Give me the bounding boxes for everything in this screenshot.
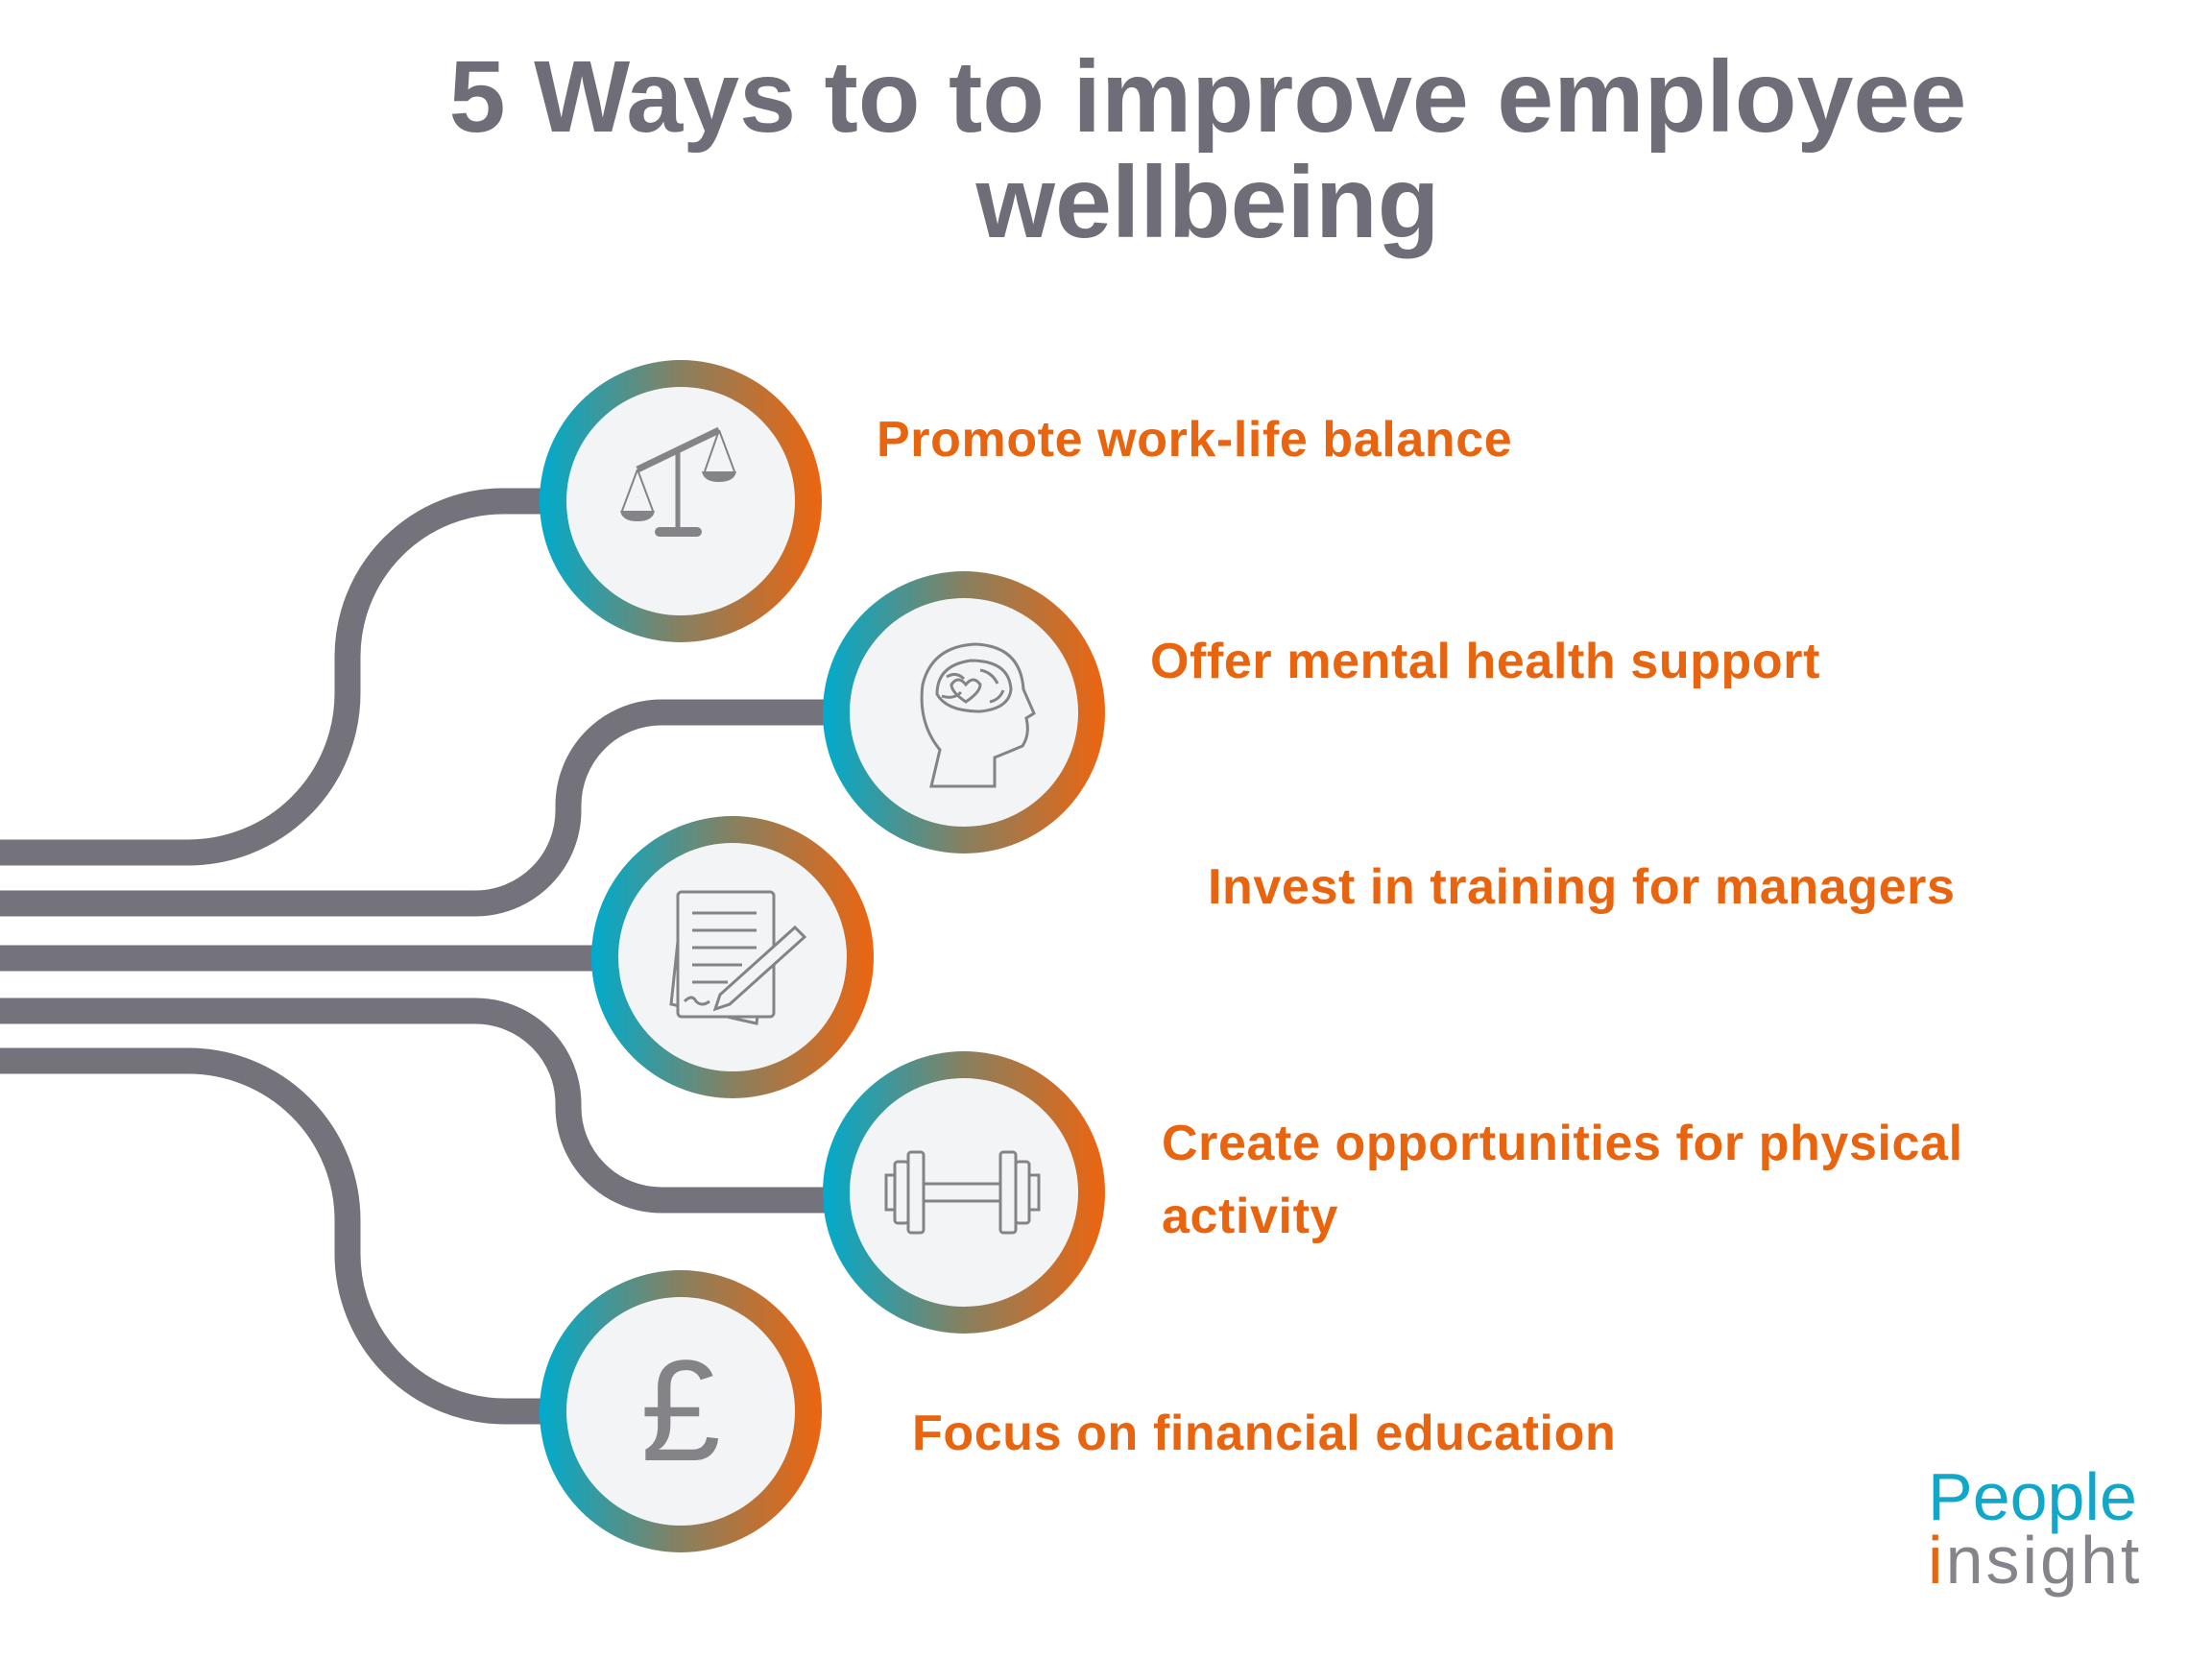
label 4 — [1162, 1116, 1963, 1244]
connector lines — [0, 501, 864, 1411]
label 4: Create opportunities for physical — [1162, 1116, 1963, 1171]
label 2: Offer mental health support — [1150, 634, 1820, 689]
label 5: Focus on financial education — [912, 1406, 1616, 1461]
circle 2: brain — [823, 571, 1105, 854]
label 1: Promote work-life balance — [877, 412, 1512, 468]
circle 5: pound sign: £ — [640, 1330, 721, 1491]
logo: People — [1928, 1459, 2137, 1534]
logo — [1928, 1459, 2142, 1598]
circle 4: dumbbell — [823, 1051, 1105, 1334]
title — [449, 40, 1966, 259]
circle 5: pound sign — [540, 1270, 822, 1552]
circle 3: documents and pen — [591, 816, 874, 1098]
label 4: activity — [1162, 1189, 1338, 1244]
label 3: Invest in training for managers — [1208, 859, 1956, 915]
title: 5 Ways to to improve employee — [449, 40, 1966, 154]
logo: insight — [1928, 1523, 2142, 1598]
title: wellbeing — [976, 146, 1439, 259]
circle 1: balance scale — [540, 360, 822, 642]
